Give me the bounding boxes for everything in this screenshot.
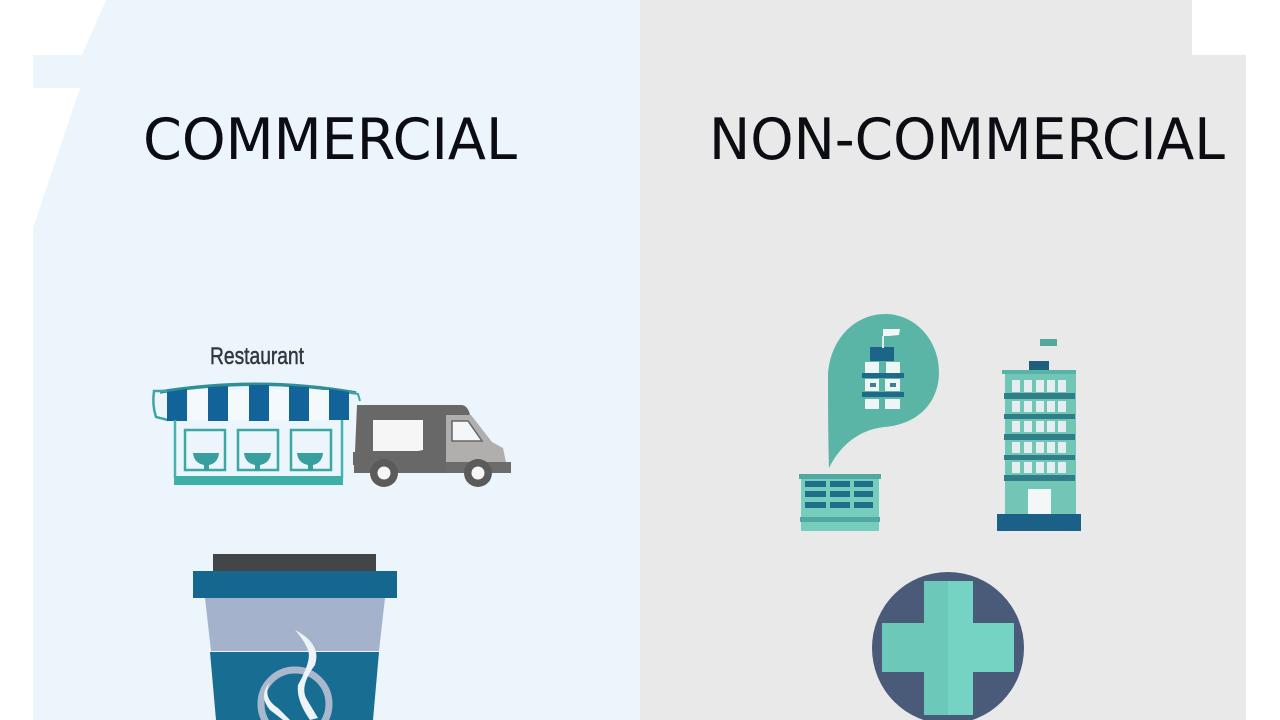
food truck xyxy=(353,405,511,487)
heading: commercial: COMMERCIAL xyxy=(143,107,517,173)
tower door xyxy=(1028,489,1051,514)
panel: commercial background xyxy=(33,0,640,720)
cup lid rim xyxy=(193,571,397,598)
bubble building roof xyxy=(870,347,894,361)
bubble xyxy=(828,314,939,468)
cup upper body xyxy=(205,598,385,651)
panel: non-commercial background xyxy=(640,0,1246,720)
restaurant sign: Restaurant xyxy=(210,343,304,370)
tower base xyxy=(997,514,1081,531)
tower windows xyxy=(1012,380,1066,473)
roof block xyxy=(1029,361,1049,371)
bubble flag xyxy=(883,329,900,336)
cross left shade xyxy=(882,581,948,715)
cross circle xyxy=(872,572,1024,720)
bubble building floors xyxy=(862,362,904,409)
flag xyxy=(1040,339,1057,346)
coffee ring emblem xyxy=(261,670,329,720)
tower body xyxy=(1005,371,1076,514)
icon: restaurant xyxy=(153,343,511,487)
icon: coffee cup xyxy=(193,554,397,720)
icon: medical cross xyxy=(872,572,1024,720)
icon: tall office building xyxy=(997,339,1081,531)
steam swirl xyxy=(264,630,318,720)
cup lid top xyxy=(213,554,376,572)
tower floor bands xyxy=(1004,393,1075,481)
restaurant storefront xyxy=(174,420,343,485)
cup sleeve xyxy=(210,652,379,720)
icon: speech bubble with building xyxy=(828,314,939,468)
restaurant awning xyxy=(153,384,360,421)
cross right side xyxy=(948,581,1014,715)
icon: low building xyxy=(799,474,881,531)
heading: non-commercial: NON-COMMERCIAL xyxy=(709,107,1225,173)
